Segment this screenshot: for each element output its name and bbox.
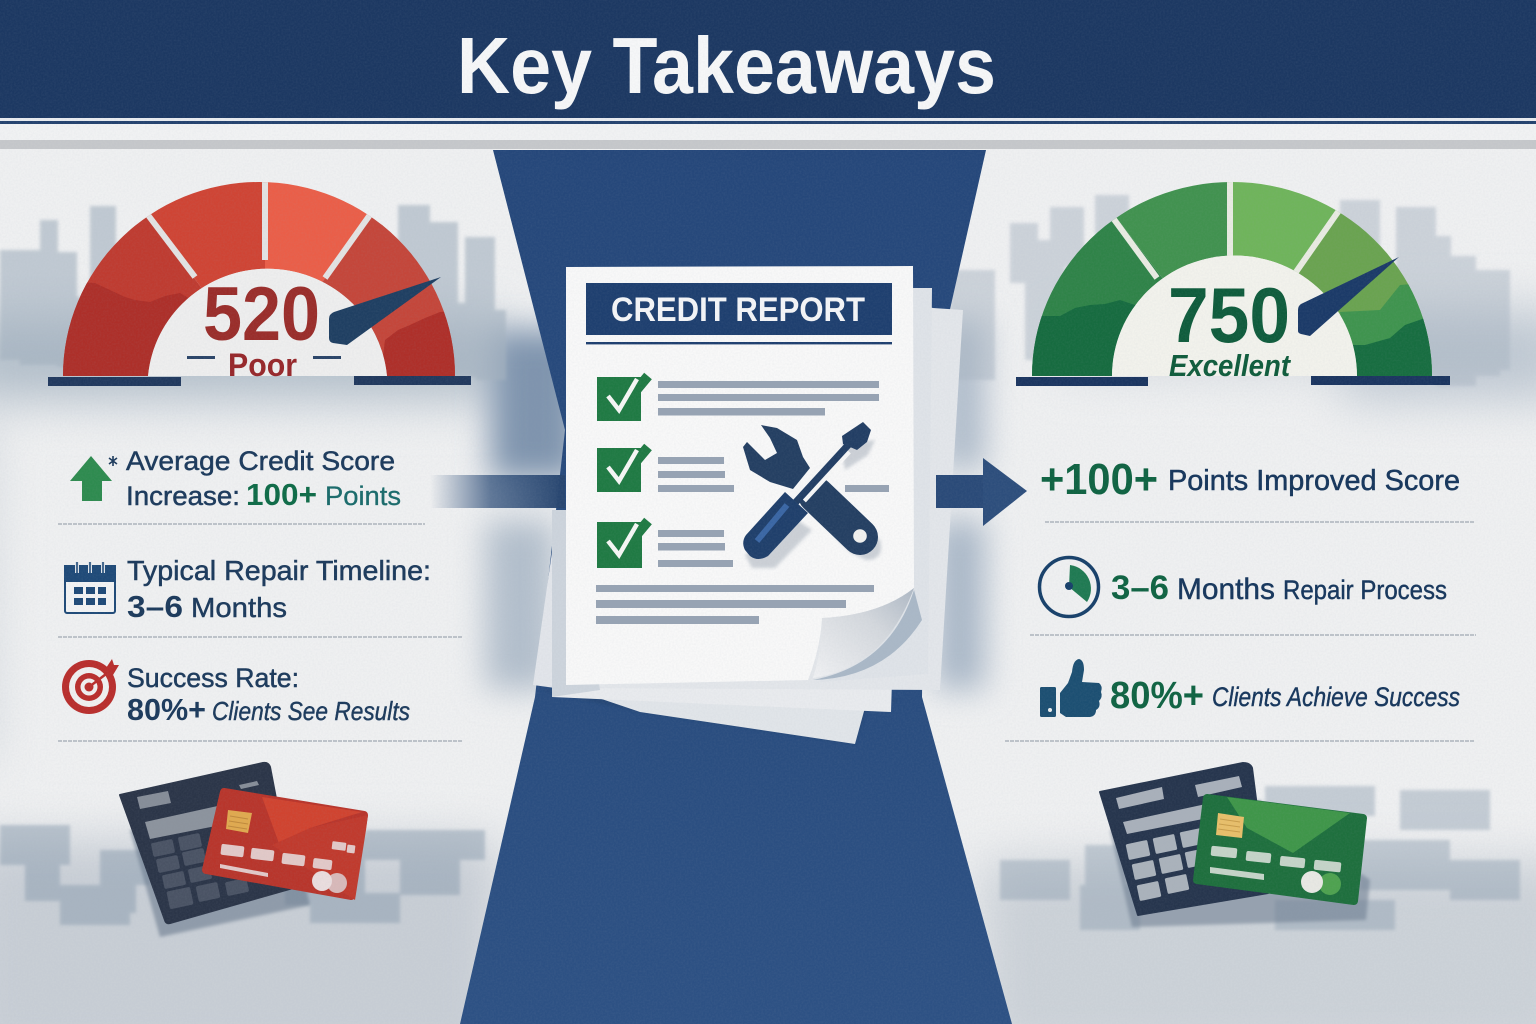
left stat: score increase: Increase: (126, 481, 240, 511)
title: Key Takeaways (457, 21, 996, 110)
right stat: repair process: Repair Process (1283, 575, 1447, 605)
right stat: client success (1040, 659, 1460, 717)
page curl (813, 588, 914, 678)
screwdriver (743, 422, 871, 559)
right stat: points improved (1040, 455, 1460, 504)
left stat: success rate: 80%+ (127, 692, 206, 727)
back sheets (540, 690, 900, 744)
gauge: poor score 520 (48, 182, 471, 386)
icon: wrench and screwdriver (743, 422, 881, 568)
report heading (586, 283, 892, 344)
left connector band (430, 475, 565, 508)
gauge: excellent score 750 (1016, 182, 1450, 386)
right stat: points improved: Points Improved Score (1168, 465, 1460, 497)
left skyline backdrop (0, 205, 506, 380)
gauge base (48, 377, 181, 386)
calculator (120, 763, 293, 923)
right connector arrow (936, 458, 1027, 526)
checklist row 1 (597, 376, 879, 421)
icon: up arrow (70, 456, 117, 501)
right stat: client success: Clients Achieve Success (1212, 682, 1460, 712)
checklist row 2 (597, 447, 889, 492)
right stat: client success: 80%+ (1110, 675, 1204, 717)
left stat: success rate: Success Rate: (127, 663, 299, 693)
central blue column (460, 150, 1012, 1024)
inner dial (1112, 256, 1357, 376)
left stat: success rate (62, 659, 410, 727)
checklist row 3 (597, 521, 733, 568)
summary lines (596, 585, 874, 624)
inner dial (148, 269, 387, 376)
score number: 750 (1168, 271, 1290, 359)
report document stack (533, 266, 963, 744)
report heading: CREDIT REPORT (611, 291, 865, 329)
header banner (0, 0, 1536, 149)
icon: target (62, 659, 119, 714)
left stat: score increase: Average Credit Score (126, 446, 395, 476)
right stat: repair process: 3–6 (1111, 569, 1169, 607)
left stat: success rate: Clients See Results (212, 696, 410, 726)
right stat: points improved: +100+ (1040, 455, 1158, 504)
score label: Poor (228, 347, 297, 383)
score label: Excellent (1169, 348, 1291, 383)
calculator (1100, 763, 1268, 915)
right skyline backdrop (950, 195, 1510, 386)
wrench (743, 425, 867, 543)
icon: calendar (64, 562, 116, 613)
left bottom blocks backdrop (0, 825, 485, 925)
red credit card (206, 792, 368, 900)
right stat: repair process: Months (1177, 573, 1275, 606)
needle (329, 277, 441, 345)
left stat: repair timeline: 3–6 (127, 589, 183, 624)
left stat: score increase: Points (325, 481, 401, 511)
icon: clock (1040, 558, 1098, 616)
icon: thumbs up (1040, 659, 1102, 717)
left stat: repair timeline (64, 555, 431, 624)
gauge base (1016, 377, 1148, 386)
left stat: score increase: 100+ (246, 477, 317, 512)
needle (1298, 257, 1399, 336)
score number: 520 (203, 272, 320, 357)
green credit card (1197, 797, 1363, 901)
left stat: score increase (70, 446, 401, 512)
main page (566, 266, 922, 685)
right bottom blocks backdrop (1000, 786, 1520, 930)
left illustration: calculator and red card (120, 763, 368, 937)
left stat: repair timeline: Months (191, 592, 287, 623)
right stat: repair process (1040, 558, 1447, 616)
right illustration: calculator and green card (1100, 763, 1370, 927)
left stat: repair timeline: Typical Repair Timeline: (127, 555, 431, 586)
